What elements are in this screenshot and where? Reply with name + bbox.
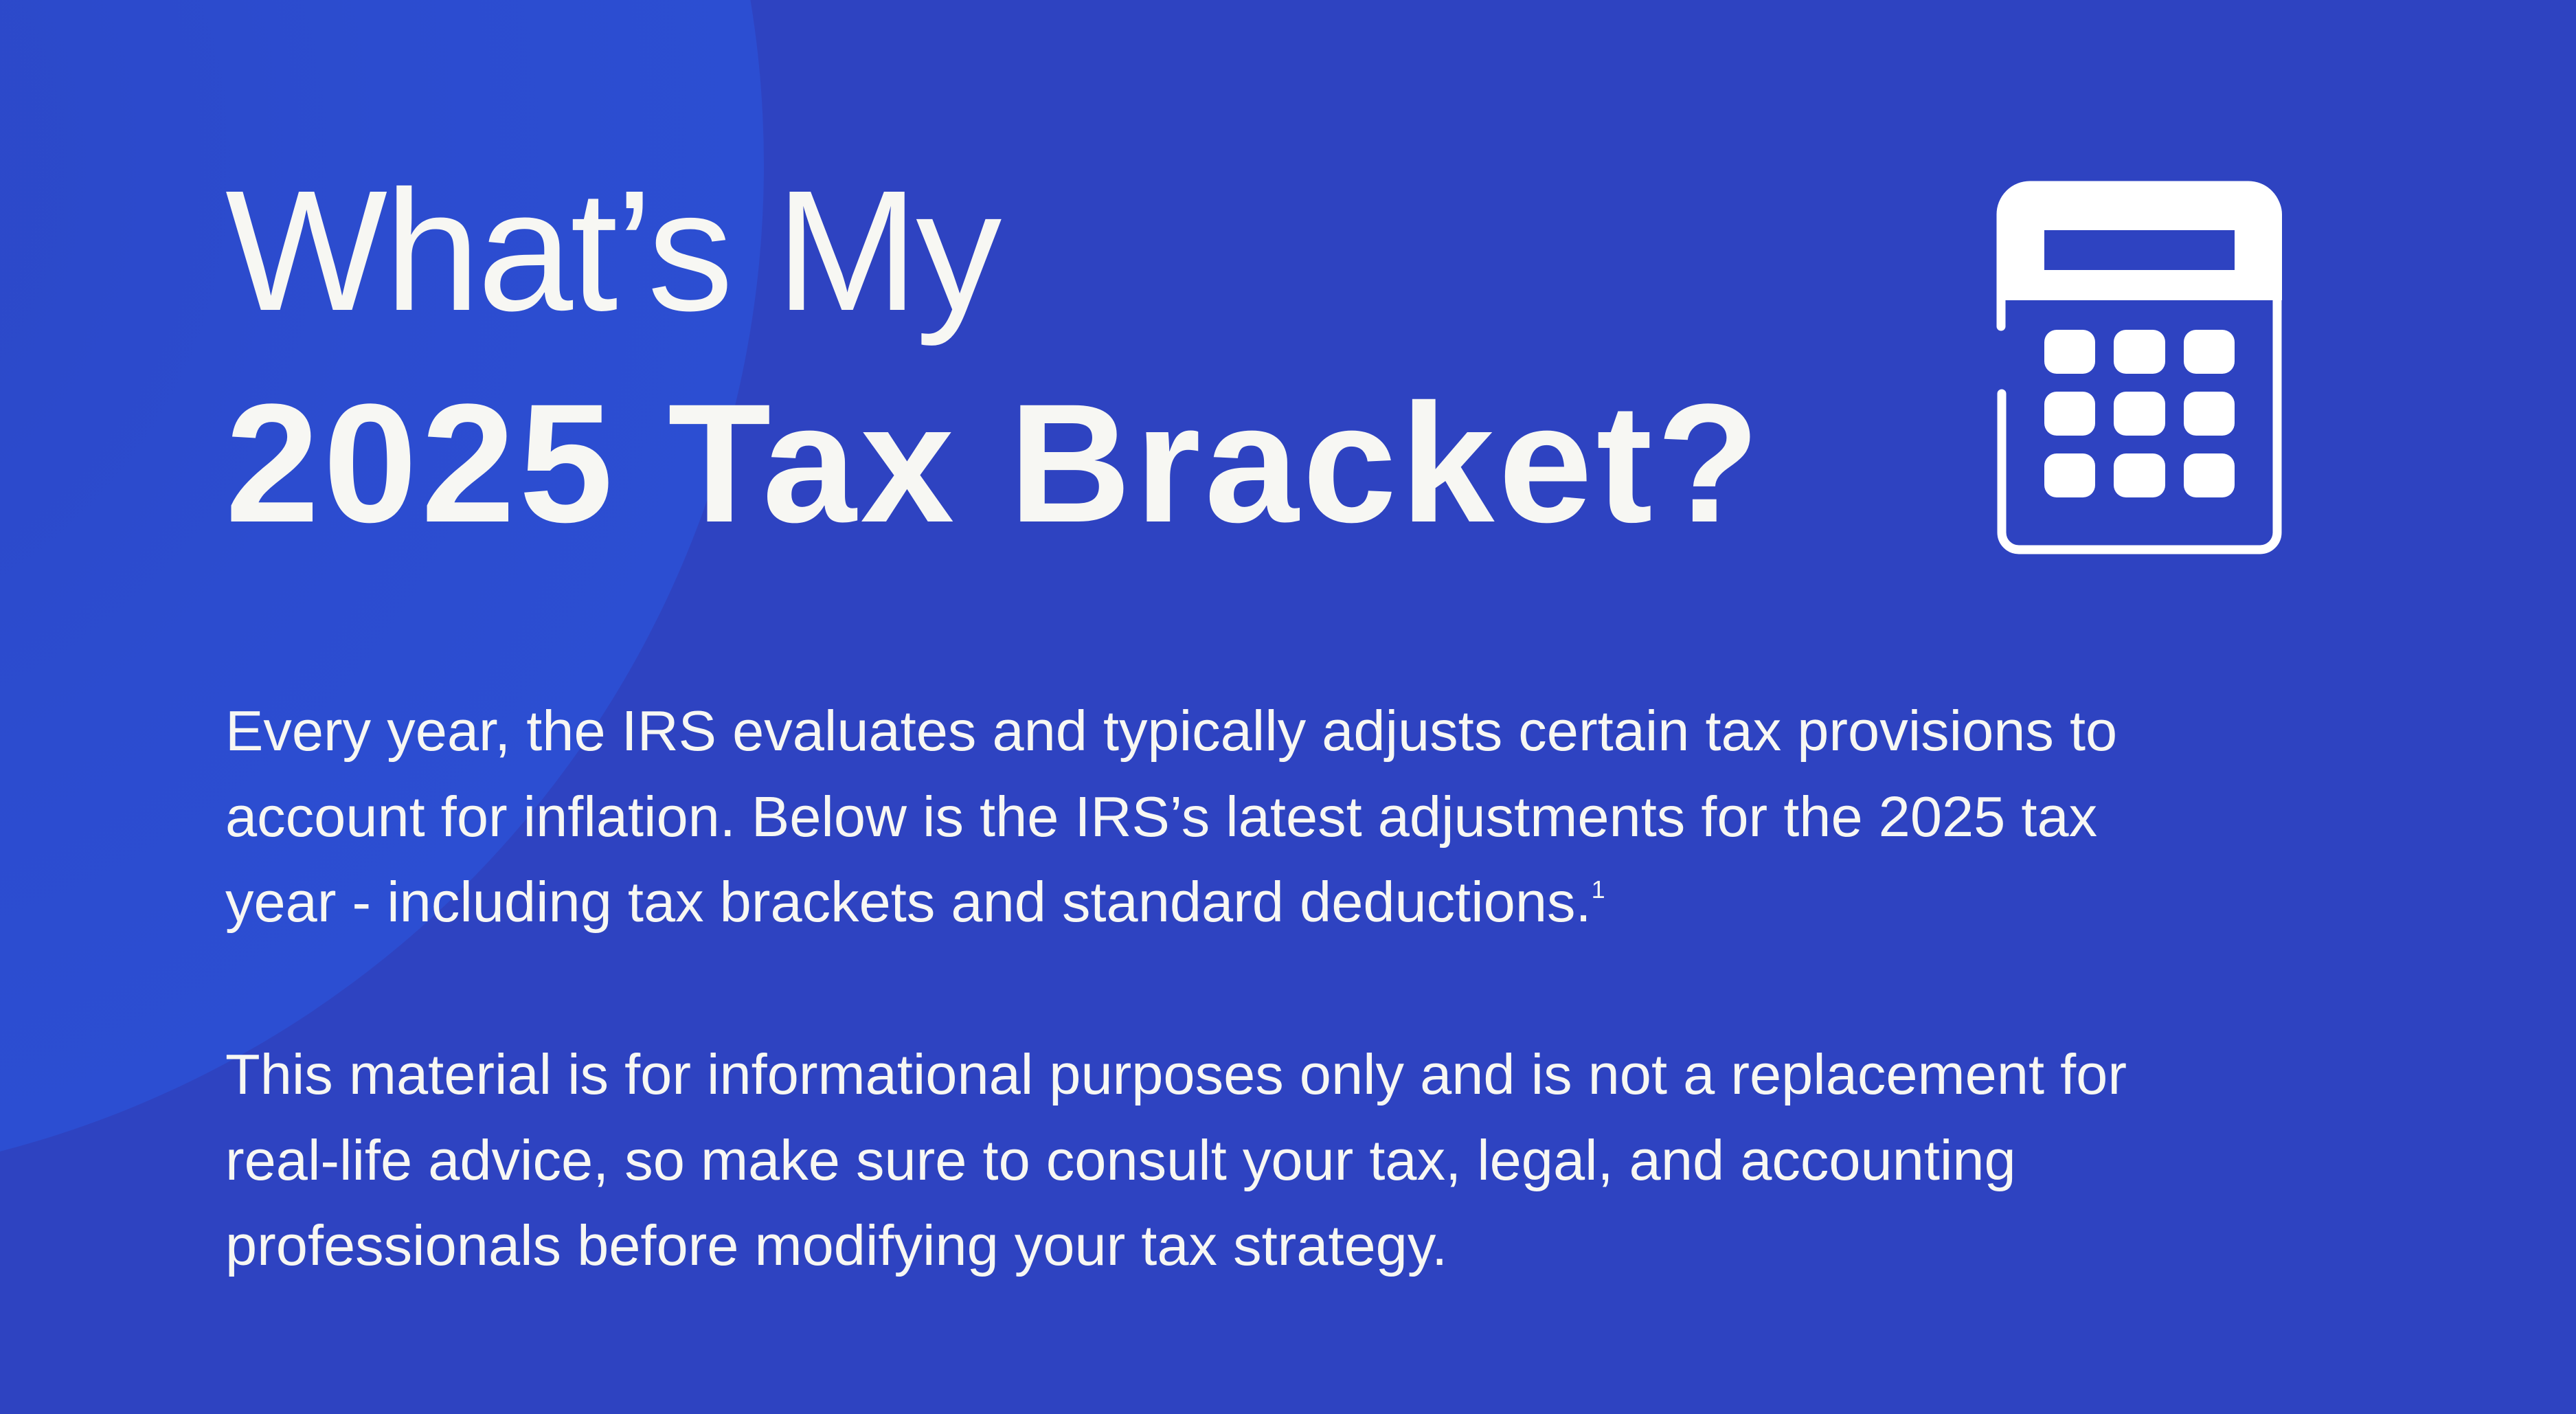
paragraph: intro [225,699,2117,934]
icon: calculator [1996,181,2282,554]
paragraph: disclaimer [225,1042,2127,1277]
background circle [0,0,764,1184]
paragraph: disclaimer: professionals before modifying your tax strategy. [225,1213,1447,1277]
paragraph: disclaimer: real-life advice, so make sure to consult your tax, legal, and accounting [225,1128,2016,1191]
paragraph: disclaimer: This material is for informational purposes only and is not a replacement for [225,1042,2127,1106]
title line 1: What’s My [225,155,999,346]
paragraph: intro: Every year, the IRS evaluates and typically adjusts certain tax provisions to [225,699,2117,763]
paragraph: intro: year - including tax brackets and standard deductions.1 [225,870,1605,934]
paragraph: intro: account for inflation. Below is the IRS’s latest adjustments for the 2025 tax [225,785,2097,848]
title line 2: 2025 Tax Bracket? [225,369,1763,558]
